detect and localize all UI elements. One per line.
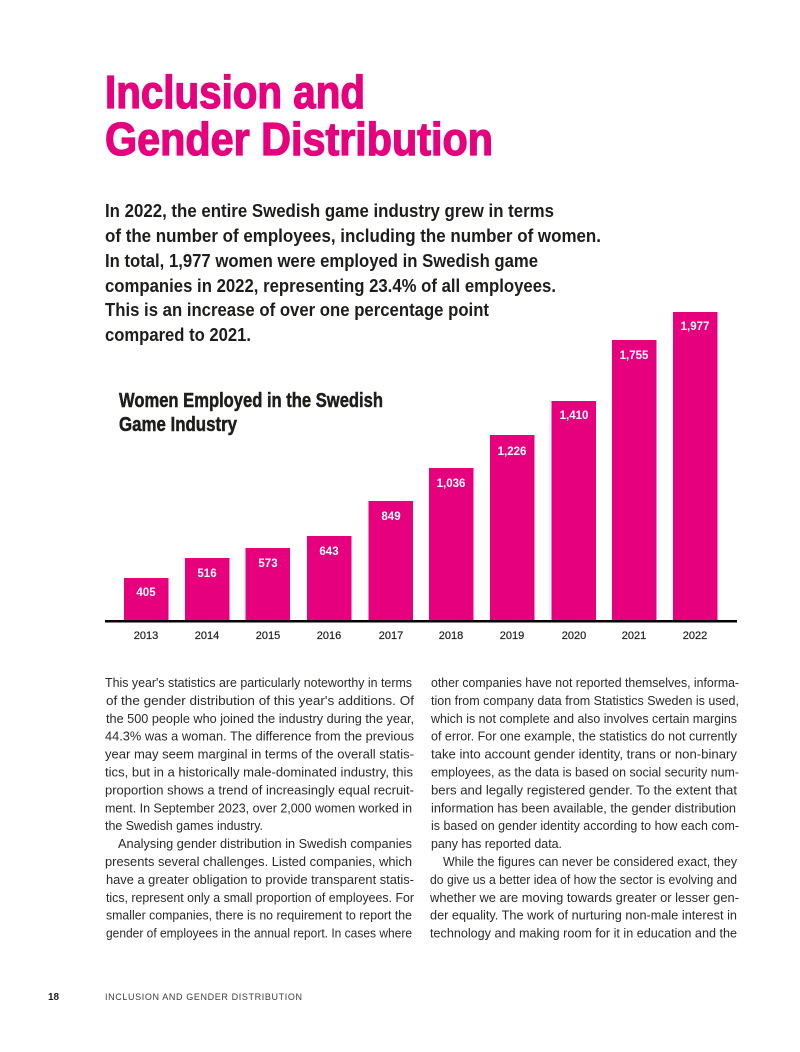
bar 2018: 2018 bbox=[439, 630, 463, 642]
bar 2013: 2013 bbox=[134, 630, 158, 642]
body text column 1: presents several challenges. Listed companies, which bbox=[105, 855, 412, 869]
intro text block: In total, 1,977 women were employed in Swedish game bbox=[105, 250, 538, 271]
body text column 2: take into account gender identity, trans or non-binary bbox=[431, 748, 738, 762]
bar 2016: 643 bbox=[319, 546, 339, 558]
running footer: INCLUSION AND GENDER DISTRIBUTION bbox=[105, 992, 302, 1002]
bar 2020: 2020 bbox=[562, 630, 586, 642]
bar 2019: 2019 bbox=[500, 630, 524, 642]
body text column 2: pany has reported data. bbox=[431, 837, 562, 851]
bar 2014: 2014 bbox=[195, 630, 219, 642]
intro text block: In 2022, the entire Swedish game industry grew in terms bbox=[105, 200, 554, 221]
body text column 2: der equality. The work of nurturing non-male interest in bbox=[430, 909, 737, 923]
intro text block: companies in 2022, representing 23.4% of all employees. bbox=[105, 275, 556, 296]
bar 2022 bbox=[673, 312, 718, 642]
bar 2020: 1,410 bbox=[560, 410, 588, 422]
bar 2018: 1,036 bbox=[437, 478, 465, 490]
bar 2019 bbox=[490, 435, 534, 642]
body text column 2: technology and making room for it in education and the bbox=[430, 927, 737, 941]
bar 2017: 849 bbox=[381, 511, 401, 523]
body text column 2: whether we are moving towards greater or lesser gen- bbox=[429, 891, 739, 905]
bar 2013 bbox=[124, 578, 168, 642]
bar 2015: 573 bbox=[258, 558, 278, 570]
bar 2015: 2015 bbox=[256, 630, 280, 642]
body text column 2: While the figures can never be considered exact, they bbox=[443, 855, 738, 869]
intro text block: compared to 2021. bbox=[105, 324, 251, 345]
bar 2022: 2022 bbox=[683, 630, 707, 642]
body text column 1: Analysing gender distribution in Swedish companies bbox=[118, 837, 412, 851]
chart heading: Game Industry bbox=[119, 414, 238, 436]
body text column 2: which is not complete and also involves certain margins bbox=[430, 712, 737, 726]
body text column 2: do give us a better idea of how the sector is evolving and bbox=[430, 873, 737, 887]
bar 2022: 1,977 bbox=[681, 321, 709, 333]
bar 2019: 1,226 bbox=[498, 446, 526, 458]
bar 2017 bbox=[368, 501, 413, 642]
body text column 1: This year's statistics are particularly noteworthy in terms bbox=[105, 676, 412, 690]
body text column 1: year may seem marginal in terms of the overall statis- bbox=[105, 748, 414, 762]
body text column 1: the Swedish games industry. bbox=[105, 819, 263, 833]
bar 2021 bbox=[612, 340, 656, 642]
title bbox=[105, 66, 493, 165]
body text column 2: bers and legally registered gender. To the extent that bbox=[431, 783, 738, 797]
body text column 2 bbox=[429, 676, 739, 941]
body text column 1: smaller companies, there is no requirement to report the bbox=[106, 909, 412, 923]
intro text block: This is an increase of over one percentage point bbox=[105, 299, 489, 320]
bar 2016: 2016 bbox=[317, 630, 341, 642]
body text column 1: the 500 people who joined the industry during the year, bbox=[106, 712, 414, 726]
body text column 1: tics, but in a historically male-dominated industry, this bbox=[105, 766, 413, 780]
bar 2016 bbox=[307, 536, 352, 642]
bar chart bbox=[105, 312, 737, 642]
intro text block: of the number of employees, including the number of women. bbox=[105, 225, 601, 246]
body text column 1: have a greater obligation to provide transparent statis- bbox=[106, 873, 414, 887]
body text column 1: proportion shows a trend of increasingly equal recruit- bbox=[105, 783, 414, 797]
body text column 1: ment. In September 2023, over 2,000 women worked in bbox=[105, 801, 412, 815]
body text column 2: employees, as the data is based on social security num- bbox=[431, 766, 739, 780]
body text column 2: tion from company data from Statistics Sweden is used, bbox=[431, 694, 739, 708]
body text column 1: gender of employees in the annual report. In cases where bbox=[106, 927, 412, 941]
title: Gender Distribution bbox=[105, 113, 493, 165]
bar 2021: 1,755 bbox=[620, 350, 649, 362]
body text column 1: tics, represent only a small proportion of employees. For bbox=[106, 891, 414, 905]
body text column 1: 44.3% was a woman. The difference from the previous bbox=[105, 730, 414, 744]
bar 2014 bbox=[185, 558, 230, 642]
body text column 1 bbox=[105, 676, 415, 941]
bar 2015 bbox=[246, 548, 290, 642]
bar 2020 bbox=[552, 401, 596, 642]
chart heading bbox=[119, 390, 383, 436]
title: Inclusion and bbox=[105, 66, 365, 118]
body text column 2: information has been available, the gender distribution bbox=[431, 801, 736, 815]
intro text block bbox=[105, 200, 601, 345]
body text column 1: of the gender distribution of this year's additions. Of bbox=[106, 694, 415, 708]
bar 2017: 2017 bbox=[379, 630, 403, 642]
bar 2021: 2021 bbox=[622, 630, 646, 642]
bar 2013: 405 bbox=[136, 587, 156, 599]
chart heading: Women Employed in the Swedish bbox=[119, 390, 383, 412]
body text column 2: of error. For one example, the statistics do not currently bbox=[431, 730, 738, 744]
bar 2018 bbox=[429, 468, 474, 642]
page number: 18 bbox=[48, 992, 60, 1003]
body text column 2: is based on gender identity according to how each com- bbox=[431, 819, 739, 833]
bar 2014: 516 bbox=[197, 568, 217, 580]
body text column 2: other companies have not reported themselves, informa- bbox=[431, 676, 739, 690]
baseline axis bbox=[105, 620, 737, 622]
